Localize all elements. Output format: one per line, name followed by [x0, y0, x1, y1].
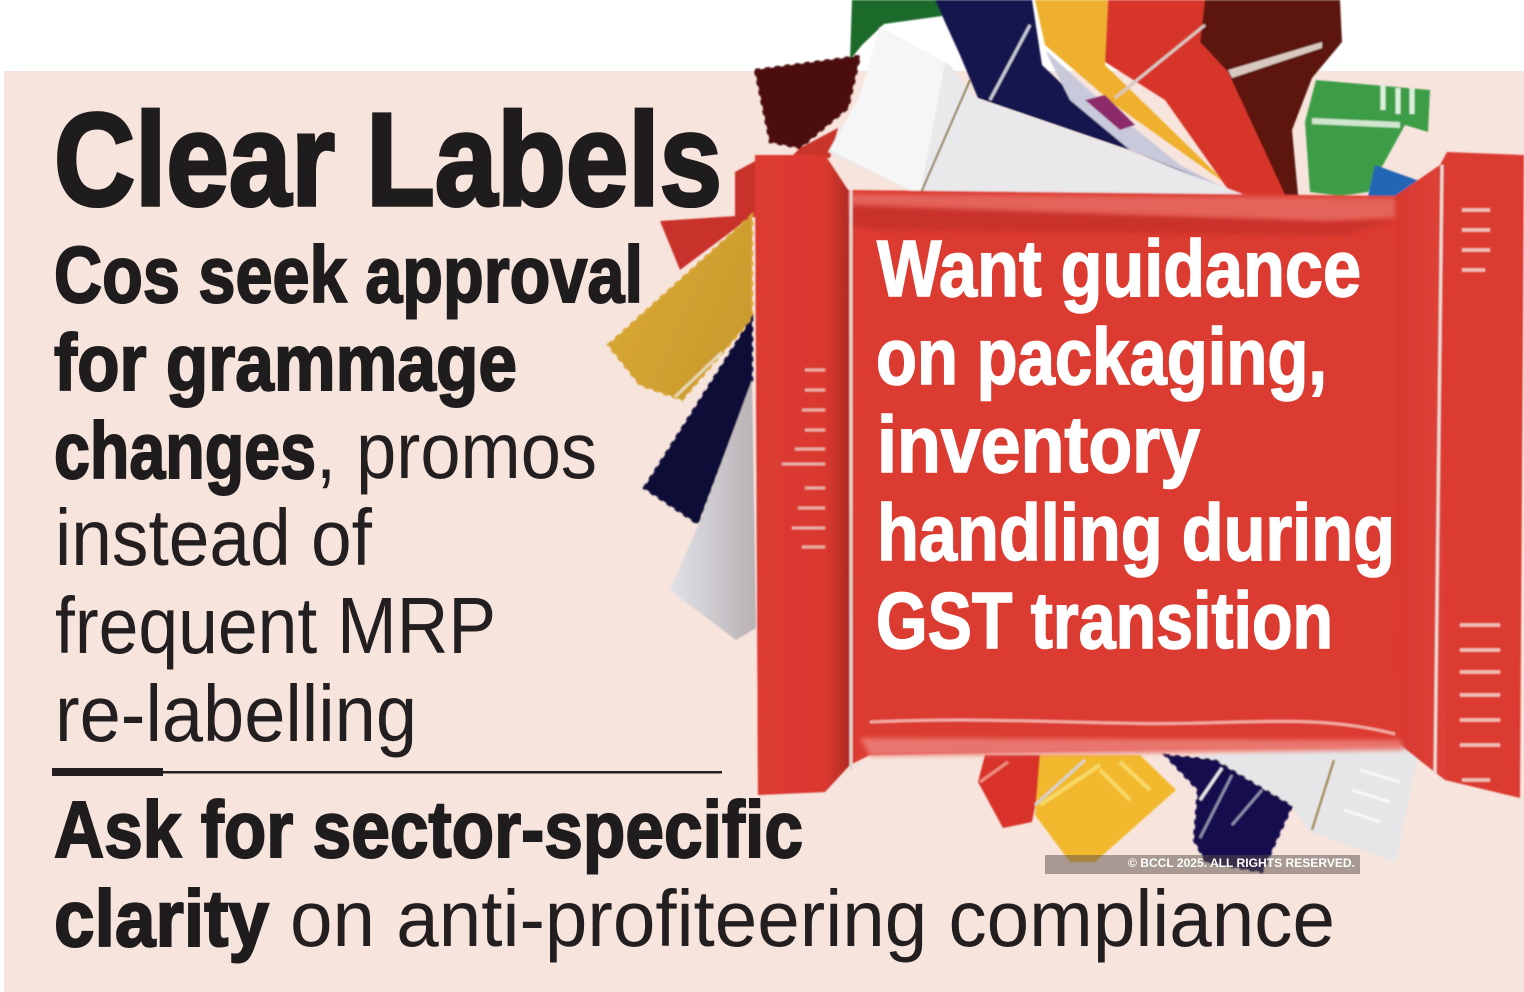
copyright band: © BCCL 2025. ALL RIGHTS RESERVED.	[1128, 856, 1355, 870]
wrappers behind, bottom	[978, 745, 1420, 872]
wrappers behind, left	[608, 160, 757, 640]
left text block: grammage changes: instead of	[55, 493, 373, 582]
wrapper text: guidance on packaging: inventory	[877, 400, 1200, 489]
illustration: pile of snack wrappers	[608, 0, 1524, 872]
wrapper text: guidance on packaging	[876, 224, 1395, 665]
wrappers behind, top	[755, 0, 1430, 196]
main red wrapper	[755, 152, 1524, 798]
wrapper text: guidance on packaging: GST transition	[876, 576, 1333, 665]
title: Clear Labels	[54, 86, 722, 233]
bottom text block: anti-profiteering clarity: clarity	[54, 874, 269, 963]
left text block: grammage changes: re-labelling	[55, 669, 417, 758]
bottom text block: anti-profiteering clarity: on anti-profiteering compliance	[290, 874, 1335, 963]
copyright band	[1045, 855, 1360, 874]
left text block: grammage changes: , promos	[316, 406, 597, 495]
left text block: grammage changes: frequent MRP	[55, 581, 496, 670]
wrapper text: guidance on packaging: handling during	[877, 488, 1395, 577]
wrapper text: guidance on packaging: Want guidance	[877, 224, 1361, 313]
left text block: grammage changes	[54, 230, 643, 758]
left text block: grammage changes: Cos seek approval	[54, 230, 643, 319]
wrapper text: guidance on packaging: on packaging,	[876, 312, 1327, 401]
left text block: grammage changes: changes	[54, 406, 316, 495]
divider rule	[52, 768, 722, 776]
left text block: grammage changes: for grammage	[54, 318, 517, 407]
bottom text block: anti-profiteering clarity: Ask for sector-specific	[54, 785, 803, 874]
bottom text block: anti-profiteering clarity	[54, 785, 1335, 963]
